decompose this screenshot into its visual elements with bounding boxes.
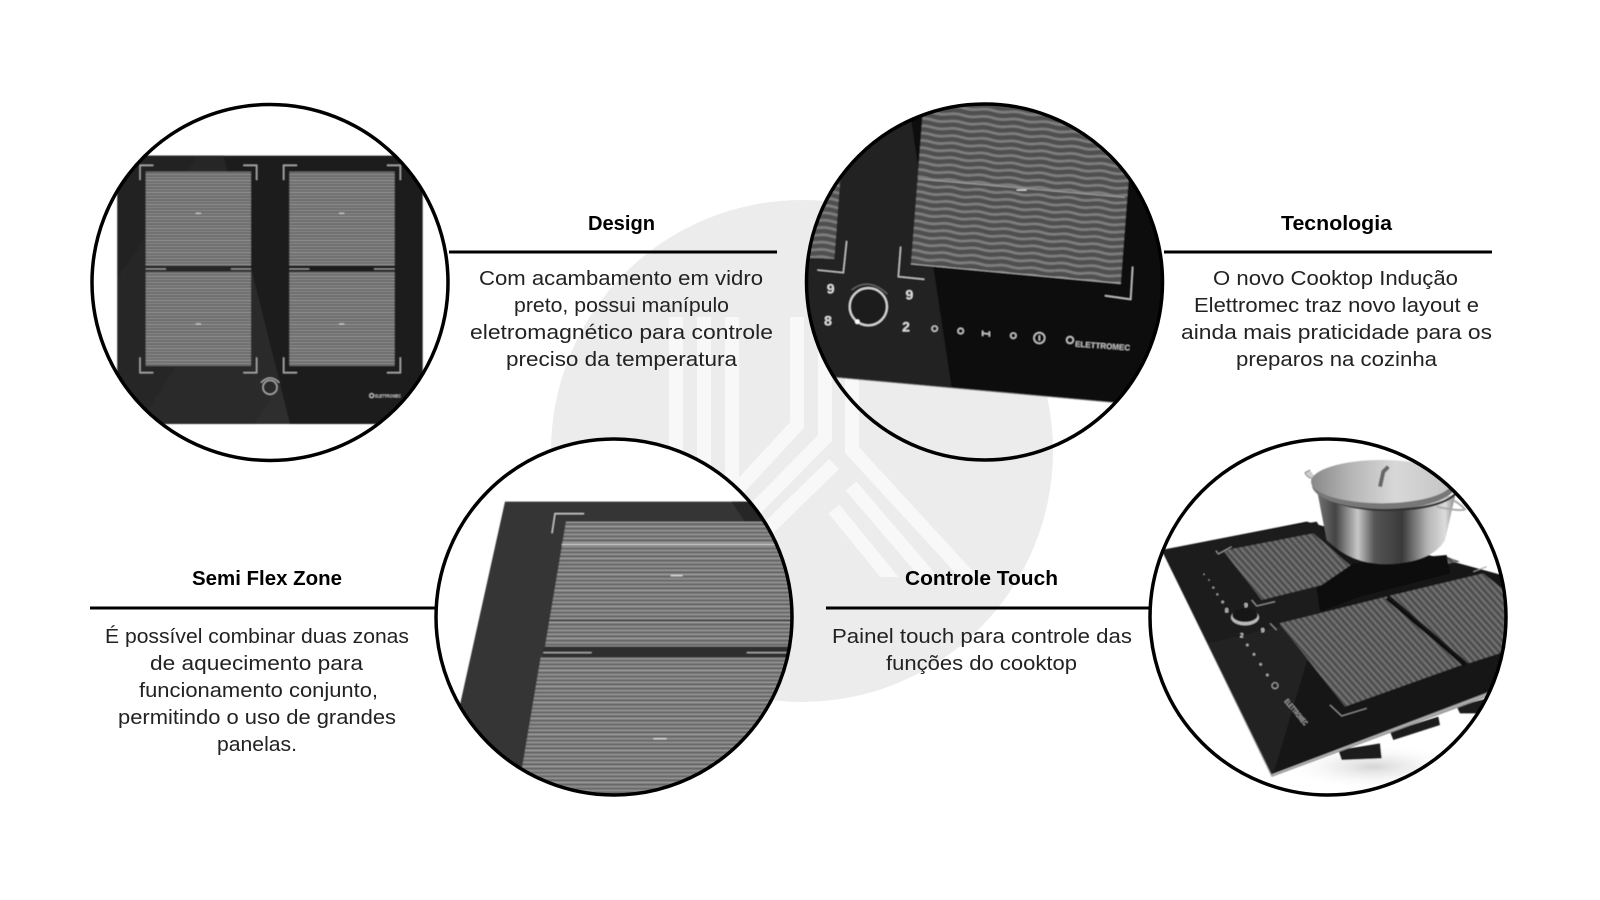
text block: controle touch: funções do cooktop [886, 652, 1077, 675]
photo circle: cooktop with pot: 8 [1225, 607, 1229, 614]
text block: tecnologia: ainda mais praticidade para os [1181, 321, 1492, 344]
text block: design: Com acambamento em vidro [479, 267, 763, 290]
heading: tecnologia: Tecnologia [1281, 213, 1393, 235]
text block: controle touch: Painel touch para controle das [832, 625, 1132, 648]
photo circle: touch control close-up: 9 [827, 280, 835, 296]
text block: semi flex zone: panelas. [217, 733, 297, 756]
panel: tecnologia [1164, 213, 1492, 371]
panel: design [449, 213, 777, 371]
connector line: semi flex zone [90, 606, 436, 610]
text block: semi flex zone: É possível combinar duas zonas [105, 625, 409, 648]
text block: tecnologia: Elettromec traz novo layout e [1194, 294, 1479, 317]
panel: semi flex zone [90, 568, 436, 756]
text block: tecnologia [1181, 267, 1492, 371]
text block: semi flex zone: permitindo o uso de grandes [118, 706, 396, 729]
photo circle: cooktop top view: ELETTROMEC [375, 393, 402, 398]
photo circle: touch control close-up: 8 [824, 312, 832, 328]
text block: design [470, 267, 773, 371]
text block: semi flex zone: funcionamento conjunto, [139, 679, 378, 702]
photo circle: touch control close-up [800, 90, 1180, 460]
panel: controle touch [826, 568, 1149, 675]
text block: design: eletromagnético para controle [470, 321, 773, 344]
text block: tecnologia: O novo Cooktop Indução [1213, 267, 1458, 290]
photo circle: touch control close-up: 9 [905, 286, 913, 302]
photo circle: cooktop with pot: 9 [1261, 627, 1265, 634]
text block: controle touch [832, 625, 1132, 675]
photo circle: semi flex zone close-up [436, 439, 810, 810]
text block: design: preto, possui manípulo [514, 294, 729, 317]
connector line: tecnologia [1164, 250, 1492, 254]
photo circle: touch control close-up: 2 [902, 318, 910, 334]
photo circle: cooktop top view [92, 104, 448, 460]
text block: semi flex zone [105, 625, 409, 756]
background circle with logo watermark [551, 200, 1053, 702]
heading: controle touch: Controle Touch [905, 568, 1058, 590]
photo circle: cooktop with pot: 9 [1244, 602, 1248, 609]
text block: semi flex zone: de aquecimento para [150, 652, 364, 675]
text block: design: preciso da temperatura [506, 348, 738, 371]
heading: semi flex zone: Semi Flex Zone [192, 568, 342, 590]
heading: design: Design [588, 213, 655, 235]
photo circle: cooktop with pot: 2 [1240, 632, 1244, 639]
connector line: controle touch [826, 606, 1149, 610]
photo circle: cooktop with pot [1150, 439, 1520, 795]
photo circle: cooktop with pot: ELETTROMEC [1282, 697, 1310, 728]
text block: tecnologia: preparos na cozinha [1236, 348, 1438, 371]
photo circle: touch control close-up: ELETTROMEC [1075, 340, 1131, 353]
connector line: design [449, 250, 777, 254]
